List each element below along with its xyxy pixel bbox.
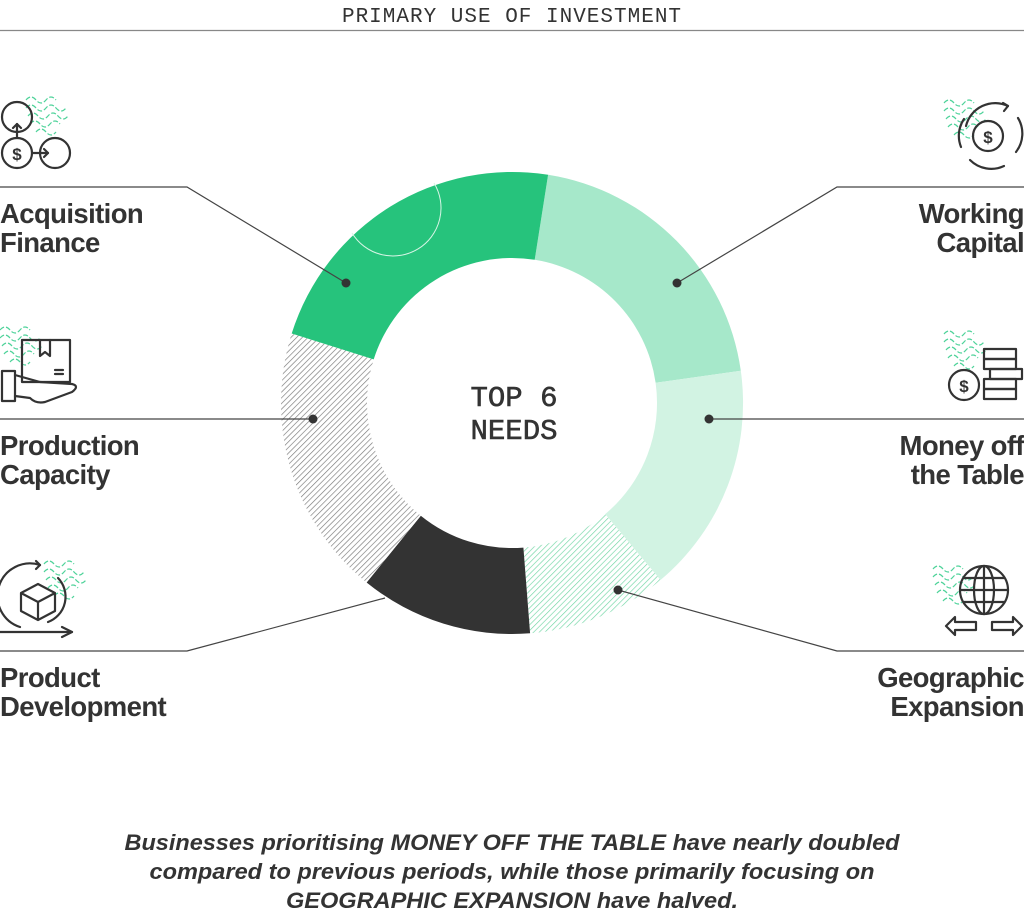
icon: globe arrows xyxy=(933,566,1022,635)
icon: production hand box xyxy=(0,327,76,402)
label: product development: Development xyxy=(0,691,167,722)
label: product development: Product xyxy=(0,662,100,693)
center text xyxy=(470,382,558,448)
icon: money stack xyxy=(944,331,1022,400)
segment: working capital xyxy=(535,175,741,383)
label: production capacity: Production xyxy=(0,430,139,461)
caption: GEOGRAPHIC EXPANSION have halved. xyxy=(286,888,738,913)
segment: money off the table xyxy=(605,371,743,580)
label: money off the table: Money off xyxy=(900,430,1024,461)
icon: working capital cycle: $ xyxy=(983,128,993,147)
label: acquisition finance: Finance xyxy=(0,227,100,258)
label: production capacity: Capacity xyxy=(0,459,111,490)
icon: working capital cycle xyxy=(944,100,1022,169)
icon: money stack: $ xyxy=(959,377,969,396)
label: money off the table: the Table xyxy=(911,459,1024,490)
center text: NEEDS xyxy=(470,415,558,448)
segment: production capacity xyxy=(281,334,421,582)
label: geographic expansion: Geographic xyxy=(877,662,1024,693)
dots xyxy=(308,278,714,594)
label: geographic expansion: Expansion xyxy=(890,691,1024,722)
icon: product development cube xyxy=(0,561,86,637)
icon: acquisition circles: $ xyxy=(12,145,22,164)
title: PRIMARY USE OF INVESTMENT xyxy=(342,6,682,29)
label: working capital: Working xyxy=(919,198,1024,229)
donut chart xyxy=(281,172,743,634)
caption: compared to previous periods, while those primarily focusing on xyxy=(150,859,874,884)
caption xyxy=(124,830,900,913)
label: working capital: Capital xyxy=(936,227,1024,258)
segment: geographic expansion xyxy=(523,514,660,633)
segment: product development xyxy=(367,516,530,634)
leader lines xyxy=(0,187,1024,651)
icon: acquisition circles xyxy=(2,97,70,168)
caption: Businesses prioritising MONEY OFF THE TABLE have nearly doubled xyxy=(124,830,900,855)
center text: TOP 6 xyxy=(470,382,558,415)
label: acquisition finance: Acquisition xyxy=(0,198,143,229)
segment: acquisition finance xyxy=(292,172,548,359)
